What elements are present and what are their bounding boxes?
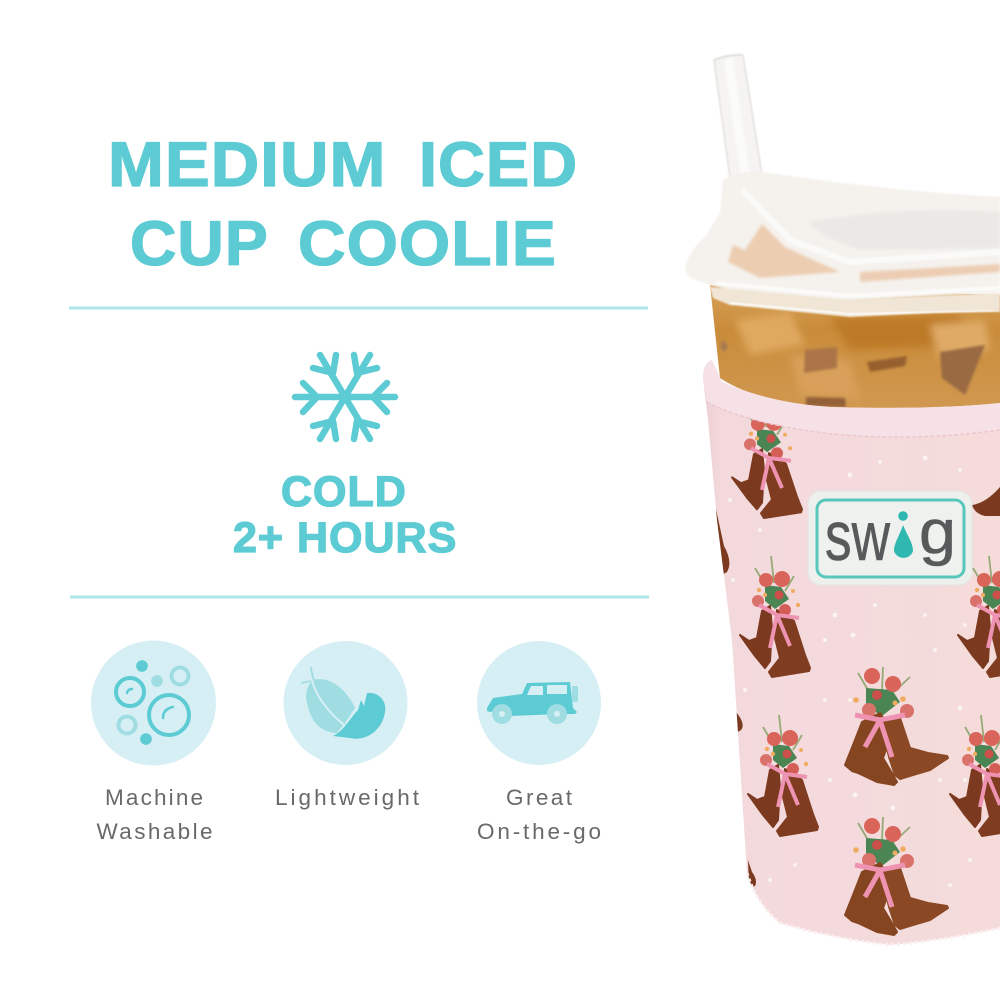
swig logo patch (808, 491, 972, 585)
cold duration text: COLD (281, 468, 407, 516)
iced coffee (710, 285, 1000, 410)
swig logo patch: sw (825, 497, 890, 575)
title: CUP (130, 209, 269, 279)
lid (686, 172, 1000, 317)
swig logo patch: g (919, 498, 956, 567)
great on-the-go label: Great (506, 785, 573, 810)
great on-the-go label: On-the-go (477, 819, 601, 844)
machine washable label (96, 785, 212, 844)
icon: great on-the-go jeep (477, 641, 601, 765)
cold duration text (233, 468, 457, 562)
coolie sleeve (703, 360, 1000, 945)
boots pattern (714, 401, 1000, 935)
title: ICED (419, 129, 578, 200)
title: COOLIE (298, 208, 557, 279)
cold duration text: 2+ HOURS (233, 514, 457, 562)
title: MEDIUM (108, 129, 386, 200)
machine washable label: Washable (96, 819, 212, 844)
lightweight label: Lightweight (275, 785, 420, 810)
straw (714, 55, 762, 205)
collar (703, 360, 1000, 437)
product photo: iced cup in coolie (686, 55, 1000, 945)
icon: lightweight feather (284, 641, 408, 765)
polka dots (728, 456, 972, 887)
icon: machine washable bubbles (91, 640, 216, 766)
title (108, 129, 578, 279)
icon: snowflake (295, 355, 395, 439)
great on-the-go label (477, 785, 601, 844)
machine washable label: Machine (105, 785, 203, 810)
